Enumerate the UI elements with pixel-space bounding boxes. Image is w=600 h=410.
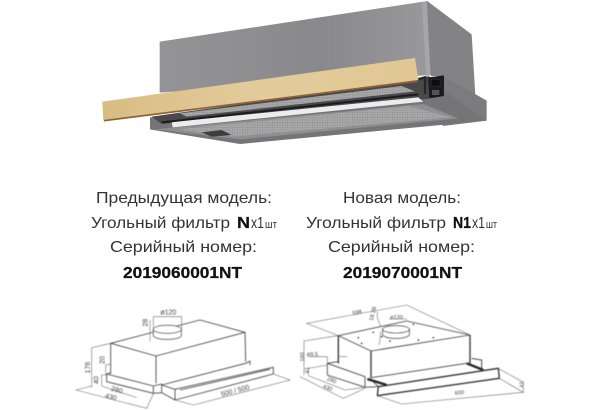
dimension label 41 left: 41 xyxy=(305,367,311,373)
previous model text block xyxy=(91,190,277,282)
hood body side panel xyxy=(427,1,475,95)
dimension label 120: ø120 xyxy=(160,309,176,316)
new filter line: Угольный фильтр xyxy=(306,215,446,232)
lower grease filter mesh xyxy=(178,106,451,137)
power switch xyxy=(431,79,440,86)
control panel xyxy=(428,75,444,98)
previous serial number: 2019060001NT xyxy=(123,265,242,282)
new filter line: шт xyxy=(486,219,497,231)
new serial label: Серийный номер: xyxy=(328,239,475,256)
dimension label 176: 176 xyxy=(85,362,92,373)
body outline xyxy=(111,320,246,383)
duct collar xyxy=(383,326,409,338)
dimension lines xyxy=(300,305,523,404)
dimension label 430: 430 xyxy=(322,384,333,393)
lower casing side xyxy=(423,76,487,126)
base and drawer outline xyxy=(327,362,499,396)
duct collar xyxy=(153,325,181,339)
previous filter line: Угольный фильтр xyxy=(91,215,230,232)
product photo: telescopic cooker hood xyxy=(102,1,487,144)
base and drawer outline xyxy=(107,361,273,400)
hood body front panel xyxy=(160,2,431,93)
dimension label 40: 40 xyxy=(94,376,101,384)
dimension drawing: previous model xyxy=(76,309,290,408)
dimension label 430: 430 xyxy=(104,393,117,403)
drawer interior shadow xyxy=(152,76,430,124)
previous model heading: Предыдущая модель: xyxy=(96,190,272,207)
upper grease filter mesh xyxy=(180,86,415,117)
previous filter line: шт xyxy=(265,219,277,231)
black rails xyxy=(367,358,483,385)
previous filter line xyxy=(91,215,277,232)
hood body corner strip xyxy=(422,1,431,76)
new filter line: N1 xyxy=(453,215,471,232)
dimension label 18 28: 18 28 xyxy=(369,306,378,322)
dimension label 280: 280 xyxy=(326,376,337,385)
new filter line: x1 xyxy=(472,215,485,232)
dimension lines xyxy=(76,317,290,408)
previous serial label: Серийный номер: xyxy=(110,239,257,256)
dimension label 120: ø120 xyxy=(390,315,403,321)
mounting holes xyxy=(357,323,434,344)
wooden bar lower edge xyxy=(104,81,418,121)
dimension label 600: 600 xyxy=(455,390,465,397)
dimension label 20: 20 xyxy=(100,356,107,364)
new serial number: 2019070001NT xyxy=(343,265,462,282)
dimension drawing: new model xyxy=(300,305,525,404)
light switch xyxy=(431,89,440,96)
black rail line xyxy=(162,94,418,122)
lower filter panel xyxy=(155,104,458,139)
new filter line xyxy=(306,215,497,232)
new model heading: Новая модель: xyxy=(343,190,461,207)
previous filter line: x1 xyxy=(251,215,264,232)
dimension label 500 / 500: 500 / 500 xyxy=(220,384,250,399)
dimension label 28: 28 xyxy=(143,319,150,327)
dimension label 9.5: ø9.5 xyxy=(307,352,318,358)
dimension label 41 right: 41 xyxy=(519,381,525,388)
dimension label 598: 598 xyxy=(352,309,362,317)
black inner frame xyxy=(415,77,425,94)
dimension label 280: 280 xyxy=(110,386,123,395)
wooden front bar xyxy=(102,58,418,121)
left latch xyxy=(202,130,232,137)
lower casing front strip xyxy=(150,90,487,144)
new model text block xyxy=(306,190,497,282)
white drawer edge xyxy=(172,97,423,127)
body outline xyxy=(338,321,470,378)
previous filter line: N xyxy=(237,215,250,232)
dimension label 160: 160 xyxy=(300,352,306,362)
